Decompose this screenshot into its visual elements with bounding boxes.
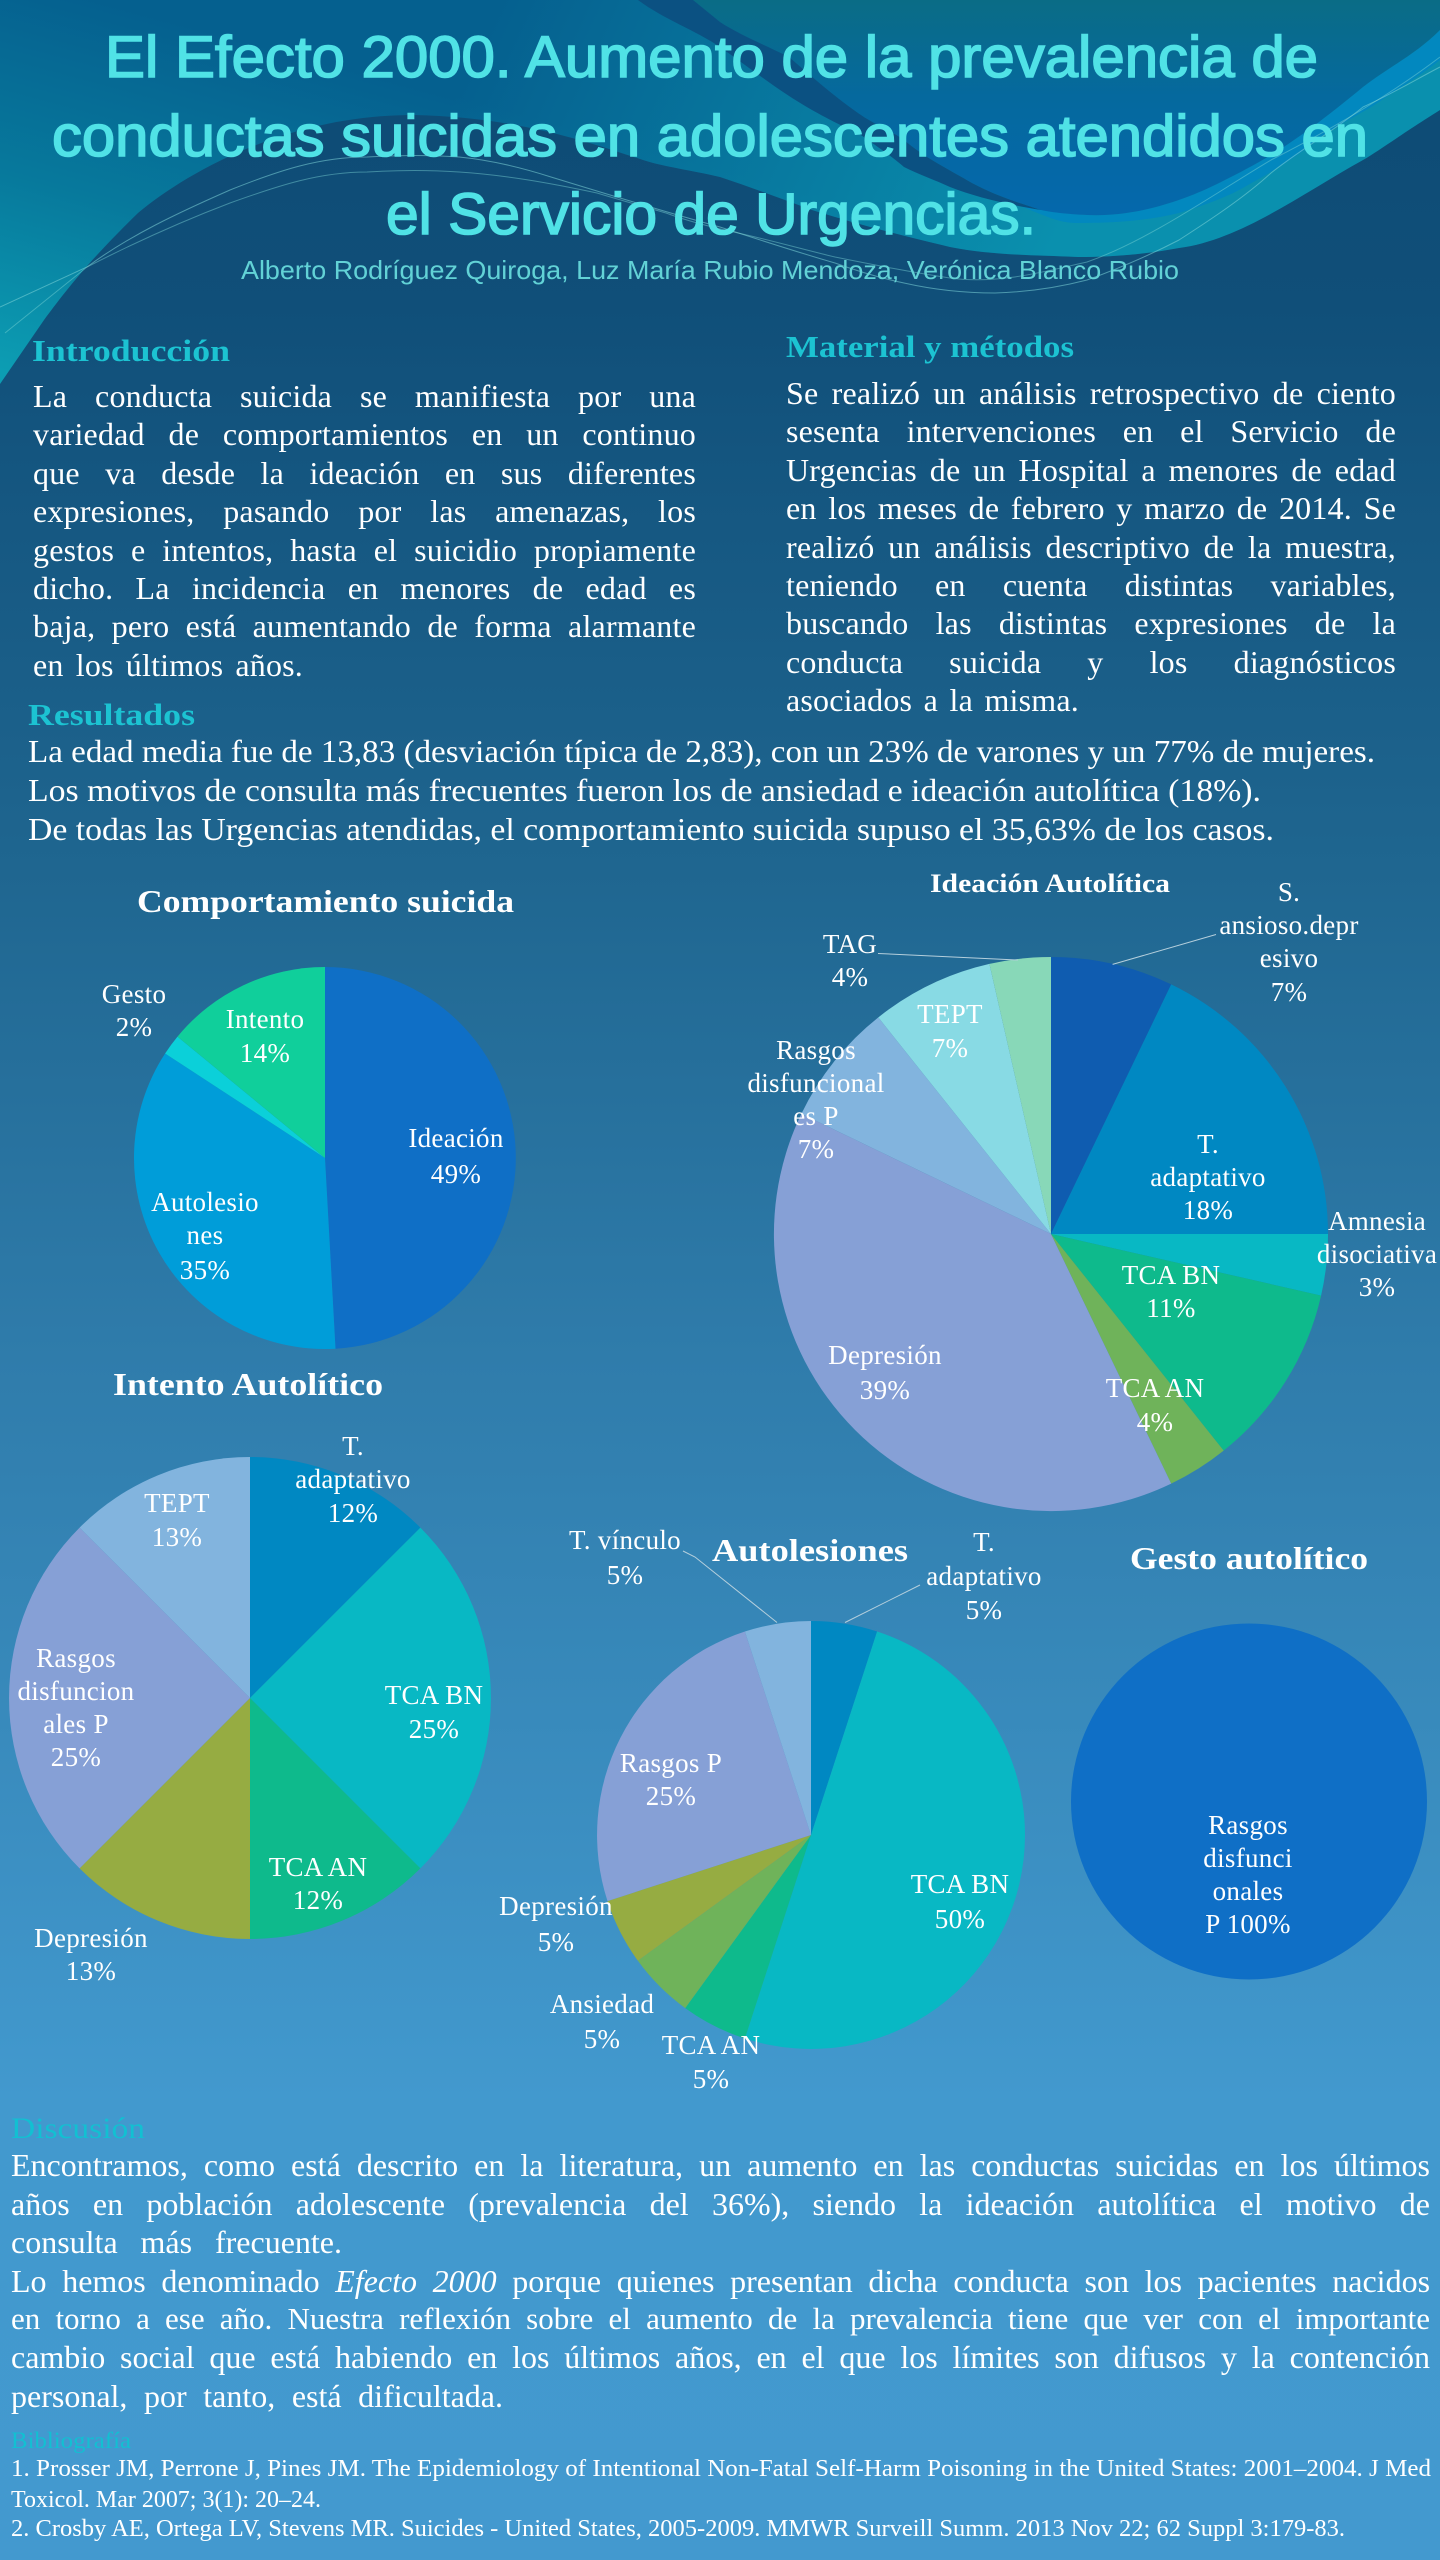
label: TCA BN: 25% bbox=[409, 1714, 459, 1744]
references: Toxicol. Mar 2007; 3(1): 20–24. bbox=[11, 2487, 321, 2513]
label: Rasgos disfuncionales P: Rasgos bbox=[1208, 1810, 1288, 1840]
text block: Material y métodos: Urgencias de un Hospital a menores de edad bbox=[786, 452, 1396, 488]
label: T. vínculo: T. vínculo bbox=[569, 1525, 681, 1555]
label: TEPT: TEPT bbox=[917, 999, 983, 1029]
text block: Material y métodos: sesenta intervenciones en el Servicio de bbox=[786, 413, 1396, 449]
label: Autolesiones: Autolesio bbox=[151, 1187, 259, 1217]
chart title: Ideación Autolítica: Ideación Autolítica bbox=[930, 869, 1170, 898]
label: Ideación: 49% bbox=[431, 1159, 481, 1189]
text block: Discusión: personal, por tanto, está dificultada. bbox=[11, 2378, 503, 2414]
label: Depresión: Depresión bbox=[499, 1891, 613, 1921]
pie chart: Intento Autolítico bbox=[9, 1431, 491, 1986]
title bbox=[52, 25, 1368, 247]
authors: Alberto Rodríguez Quiroga, Luz María Rubio Mendoza, Verónica Blanco Rubio bbox=[241, 255, 1179, 285]
label: T. adaptativo: 18% bbox=[1183, 1195, 1233, 1225]
label: Rasgos disfuncionales P: disfunci bbox=[1203, 1843, 1293, 1873]
label: Gesto: Gesto bbox=[102, 979, 166, 1009]
label: TCA AN: 5% bbox=[693, 2064, 729, 2094]
label: Rasgos disfuncionales P: onales bbox=[1213, 1876, 1283, 1906]
label: S. ansioso-depresivo: esivo bbox=[1260, 943, 1318, 973]
label: Rasgos disfuncionales P: Rasgos bbox=[36, 1643, 116, 1673]
text block: Discusión: en torno a ese año. Nuestra reflexión sobre el aumento de la prevalencia tiene que ver con el importante bbox=[11, 2301, 1430, 2336]
label: TAG: 4% bbox=[832, 962, 868, 992]
text block: Discusión bbox=[11, 2147, 1430, 2414]
chart title: Comportamiento suicida: Comportamiento suicida bbox=[137, 883, 514, 919]
text block: Discusión: cambio social que está habiendo en los últimos años, en el que los límites son difusos y la contención bbox=[11, 2339, 1430, 2375]
label: TCA AN: 4% bbox=[1137, 1407, 1173, 1437]
label: Depresión: Depresión bbox=[34, 1923, 148, 1953]
label: S. ansioso-depresivo: ansioso.depr bbox=[1219, 910, 1359, 940]
label: TCA AN: 12% bbox=[293, 1885, 343, 1915]
label: Rasgos P: Rasgos P bbox=[620, 1748, 722, 1778]
label: T. adaptativo: T. bbox=[342, 1431, 364, 1461]
text block: Introducción: gestos e intentos, hasta el suicidio propiamente bbox=[33, 532, 696, 568]
heading: Resultados: Resultados bbox=[28, 697, 195, 732]
text block: Material y métodos: en los meses de febrero y marzo de 2014. Se bbox=[786, 490, 1396, 526]
chart title: Autolesiones: Autolesiones bbox=[712, 1532, 908, 1568]
pie chart: Autolesiones bbox=[499, 1525, 1042, 2094]
chart title: Gesto autolítico: Gesto autolítico bbox=[1130, 1540, 1368, 1576]
results text bbox=[28, 733, 1375, 847]
label: Depresión: Depresión bbox=[828, 1340, 942, 1370]
label: Depresión: 13% bbox=[66, 1956, 116, 1986]
text block: Material y métodos: realizó un análisis descriptivo de la muestra, bbox=[786, 529, 1396, 565]
references: 2. Crosby AE, Ortega LV, Stevens MR. Suicides - United States, 2005-2009. MMWR Surveill Summ. 2013 Nov 22; 62 Suppl 3:179-83. bbox=[11, 2516, 1345, 2542]
label: Autolesiones: 35% bbox=[180, 1255, 230, 1285]
text block: Introducción: expresiones, pasando por las amenazas, los bbox=[33, 493, 696, 529]
text block: Introducción: baja, pero está aumentando de forma alarmante bbox=[33, 608, 696, 644]
label: Rasgos disfuncionales P: Rasgos bbox=[776, 1035, 856, 1065]
leader line: T. adaptativo bbox=[845, 1585, 920, 1622]
text block: Material y métodos: conducta suicida y los diagnósticos bbox=[786, 644, 1396, 680]
label: Depresión: 5% bbox=[538, 1927, 574, 1957]
label: Ideación: Ideación bbox=[408, 1123, 504, 1153]
text block: Discusión: consulta más frecuente. bbox=[11, 2224, 342, 2260]
label: Ansiedad: Ansiedad bbox=[550, 1989, 654, 2019]
label: T. adaptativo: T. bbox=[973, 1527, 995, 1557]
label: Intento: 14% bbox=[240, 1038, 290, 1068]
label: T. adaptativo: T. bbox=[1197, 1129, 1219, 1159]
text block: Material y métodos: teniendo en cuenta distintas variables, bbox=[786, 567, 1396, 603]
label: S. ansioso-depresivo: S. bbox=[1278, 877, 1300, 907]
heading: Introducción: Introducción bbox=[32, 333, 230, 368]
text block: Discusión: años en población adolescente (prevalencia del 36%), siendo la ideación autolítica el motivo de bbox=[11, 2186, 1430, 2222]
text block: Material y métodos: asociados a la misma. bbox=[786, 682, 1079, 718]
label: Rasgos disfuncionales P: es P bbox=[793, 1101, 839, 1131]
label: TCA BN: 11% bbox=[1146, 1293, 1196, 1323]
label: TCA AN: TCA AN bbox=[1106, 1373, 1204, 1403]
leader line: T. vínculo bbox=[683, 1551, 777, 1622]
results text: Los motivos de consulta más frecuentes fueron los de ansiedad e ideación autolítica (18%). bbox=[28, 772, 1261, 808]
label: Rasgos disfuncionales P: disfuncion bbox=[18, 1676, 135, 1706]
text block: Introducción: en los últimos años. bbox=[33, 647, 303, 683]
chart title: Intento Autolítico: Intento Autolítico bbox=[113, 1366, 383, 1402]
heading: Material y métodos: Material y métodos bbox=[786, 329, 1074, 364]
label: Amnesia disociativa: Amnesia bbox=[1328, 1206, 1426, 1236]
label: TCA AN: TCA AN bbox=[269, 1852, 367, 1882]
results text: La edad media fue de 13,83 (desviación típica de 2,83), con un 23% de varones y un 77% de mujeres. bbox=[28, 733, 1375, 769]
title: El Efecto 2000. Aumento de la prevalencia de bbox=[105, 25, 1318, 90]
text block: Introducción: La conducta suicida se manifiesta por una bbox=[33, 378, 696, 414]
leader line: S. ansioso-depresivo bbox=[1113, 934, 1216, 964]
label: Depresión: 39% bbox=[860, 1375, 910, 1405]
header wave graphic bbox=[0, 0, 1440, 384]
references: 1. Prosser JM, Perrone J, Pines JM. The Epidemiology of Intentional Non-Fatal Self-Harm Poisoning in the United States: 2001–2004. J Med bbox=[11, 2456, 1431, 2482]
label: Autolesiones: nes bbox=[187, 1220, 223, 1250]
label: T. adaptativo: 12% bbox=[328, 1498, 378, 1528]
text block: Introducción bbox=[33, 378, 696, 683]
label: TCA BN: TCA BN bbox=[911, 1869, 1009, 1899]
label: T. adaptativo: adaptativo bbox=[295, 1464, 411, 1494]
label: Rasgos disfuncionales P: 25% bbox=[51, 1742, 101, 1772]
label: Intento: Intento bbox=[226, 1004, 304, 1034]
label: Rasgos disfuncionales P: disfuncional bbox=[747, 1068, 885, 1098]
text block: Introducción: variedad de comportamientos en un continuo bbox=[33, 416, 696, 452]
heading: Discusión: Discusión bbox=[11, 2112, 145, 2145]
label: Rasgos P: 25% bbox=[646, 1781, 696, 1811]
label: TCA BN: TCA BN bbox=[385, 1680, 483, 1710]
label: Rasgos disfuncionales P: ales P bbox=[43, 1709, 109, 1739]
leader line: TAG bbox=[878, 954, 1018, 960]
label: Amnesia disociativa: disociativa bbox=[1317, 1239, 1437, 1269]
label: T. adaptativo: 5% bbox=[966, 1595, 1002, 1625]
label: T. adaptativo: adaptativo bbox=[1150, 1162, 1266, 1192]
label: T. adaptativo: adaptativo bbox=[926, 1561, 1042, 1591]
text block: Introducción: dicho. La incidencia en menores de edad es bbox=[33, 570, 696, 606]
heading: Bibliografía: Bibliografía bbox=[11, 2428, 131, 2453]
title: el Servicio de Urgencias. bbox=[386, 182, 1036, 247]
references bbox=[11, 2456, 1431, 2542]
label: TEPT: 7% bbox=[932, 1033, 968, 1063]
label: Amnesia disociativa: 3% bbox=[1359, 1272, 1395, 1302]
text block: Discusión: Encontramos, como está descrito en la literatura, un aumento en las conductas suicidas en los últimos bbox=[11, 2147, 1430, 2183]
label: TCA BN: 50% bbox=[935, 1904, 985, 1934]
pie chart: Ideación Autolítica bbox=[747, 877, 1437, 1511]
text block: Material y métodos bbox=[786, 375, 1396, 718]
label: Rasgos disfuncionales P: P 100% bbox=[1205, 1909, 1291, 1939]
text block: Material y métodos: buscando las distintas expresiones de la bbox=[786, 605, 1396, 641]
label: TEPT: 13% bbox=[152, 1522, 202, 1552]
label: TCA BN: TCA BN bbox=[1122, 1260, 1220, 1290]
label: TCA AN: TCA AN bbox=[662, 2030, 760, 2060]
label: Gesto: 2% bbox=[116, 1012, 152, 1042]
label: Rasgos disfuncionales P: 7% bbox=[798, 1134, 834, 1164]
label: Ansiedad: 5% bbox=[584, 2024, 620, 2054]
text block: Introducción: que va desde la ideación en sus diferentes bbox=[33, 455, 696, 491]
pie chart: Gesto autolítico bbox=[1071, 1624, 1427, 1980]
label: TAG: TAG bbox=[823, 929, 877, 959]
pie chart: Comportamiento suicida bbox=[102, 967, 516, 1349]
label: TEPT: TEPT bbox=[144, 1488, 210, 1518]
text block: Discusión: Lo hemos denominado Efecto 2000 porque quienes presentan dicha conducta son los pacientes nacidos bbox=[11, 2263, 1430, 2299]
label: T. vínculo: 5% bbox=[607, 1560, 643, 1590]
text block: Material y métodos: Se realizó un análisis retrospectivo de ciento bbox=[786, 375, 1396, 411]
results text: De todas las Urgencias atendidas, el comportamiento suicida supuso el 35,63% de los casos. bbox=[28, 811, 1274, 847]
title: conductas suicidas en adolescentes atendidos en bbox=[52, 104, 1368, 169]
label: S. ansioso-depresivo: 7% bbox=[1271, 977, 1307, 1007]
